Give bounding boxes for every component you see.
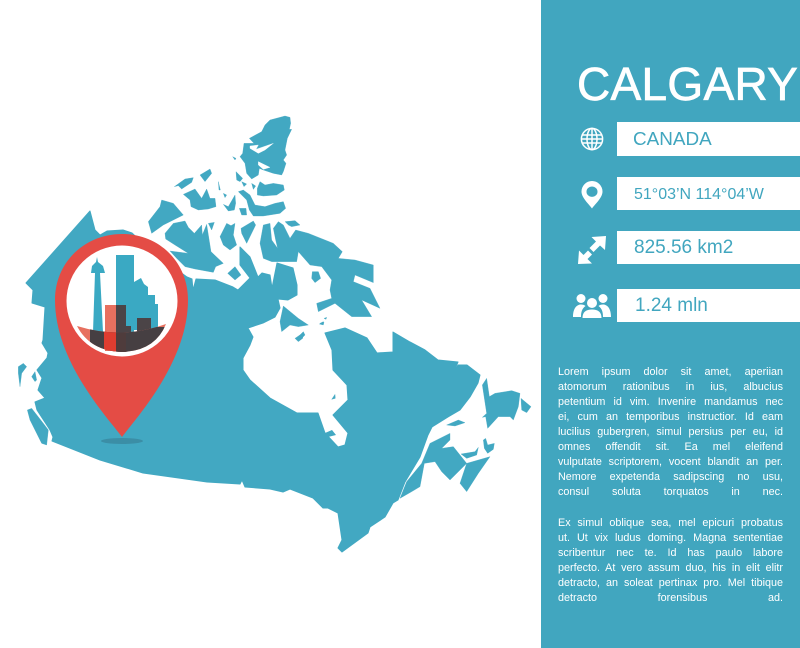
Hudson Bay small islands [295, 322, 335, 399]
bar: coordinates: 51°03’N 114°04’W [634, 186, 764, 203]
pin shadow [101, 438, 143, 444]
Arctic islands north [233, 116, 292, 216]
lens base [77, 324, 166, 352]
bar: area [617, 231, 800, 264]
skyline [77, 255, 166, 356]
tower [91, 257, 105, 332]
text block: second paragraph: detracto forensibus ad. [558, 592, 783, 604]
text block: second paragraph: scribentur nec te. Id has paulo labore [558, 547, 783, 559]
icon: people [573, 294, 611, 318]
text block: first paragraph: Nemore expetenda sadipscing no usu, [558, 471, 783, 483]
panel: city facts [541, 0, 800, 648]
text block: first paragraph: atomorum rationibus in ius, albucius [558, 381, 783, 393]
text block: second paragraph: Ex simul oblique sea, mel epicuri probatus [558, 517, 783, 529]
mainland Canada [26, 211, 480, 552]
text block: first paragraph: Lorem ipsum dolor sit amet, aperiian [558, 366, 783, 378]
pin body [55, 234, 188, 437]
text block: first paragraph: omnes offendit sit. Ea mel eleifend [558, 441, 783, 453]
bar: population: 1.24 mln [635, 295, 708, 316]
text block: second paragraph: perfecto. At vero assum duo, his in elit elitr [558, 562, 783, 574]
Arctic islands west [148, 169, 256, 280]
text block: second paragraph: detracto, an soleat pertinax pro. Mel tibique [558, 577, 783, 589]
white lake in James Bay [325, 430, 336, 437]
bar: country: CANADA [633, 129, 712, 150]
title: CALGARY [577, 58, 798, 110]
bar: area: 825.56 km2 [634, 237, 733, 258]
location pin [55, 234, 188, 444]
map of Canada [18, 116, 532, 552]
Atlantic provinces and islands [400, 378, 531, 498]
icon: globe [580, 128, 604, 150]
text block: first paragraph [558, 366, 783, 498]
Pacific islands [18, 363, 48, 445]
text block: first paragraph: vulputate scriptorem, vocent blandit an per. [558, 456, 783, 468]
text block: second paragraph: ut. Ut vix ludus doming. Magna sententiae [558, 532, 783, 544]
Baffin and Hudson Strait islands [260, 221, 380, 340]
icon: location pin [582, 181, 602, 208]
icon: resize arrows [578, 236, 606, 264]
bar: coordinates [617, 177, 800, 210]
white pin circle [66, 246, 178, 356]
text block: first paragraph: petentium id vim. Invenire mandamus nec [558, 396, 783, 408]
bar: country [617, 122, 800, 156]
text block: first paragraph: consul soluta torquatos in nec. [558, 486, 783, 498]
text block: first paragraph: lucilius gubergren, simul persius per eu, id [558, 426, 783, 438]
text block: second paragraph [558, 517, 783, 604]
text block: first paragraph: ei, cum an temporibus instructior. Id eam [558, 411, 783, 423]
blue towers [116, 255, 134, 347]
red and dark buildings [105, 305, 116, 351]
bar: population [617, 289, 800, 322]
